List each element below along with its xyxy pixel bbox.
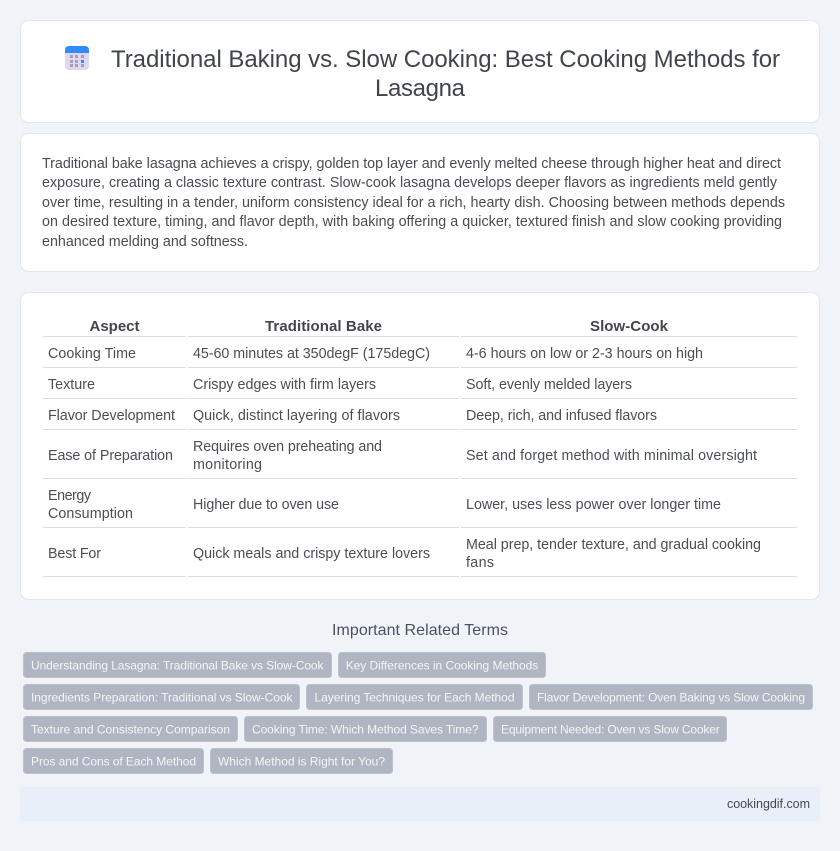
tag: ingredients preparation: Ingredients Preparation: Traditional vs Slow-Cook [31, 690, 294, 704]
tag: key differences [338, 652, 546, 678]
tag: key differences: Key Differences in Cooking Methods [346, 658, 538, 672]
table header row: Traditional Bake [265, 318, 382, 335]
panel: summary paragraph [20, 134, 820, 272]
row: best for: fans [466, 555, 494, 571]
table header row: Slow-Cook [590, 318, 669, 335]
row: best for: Quick meals and crispy texture lovers [193, 546, 430, 562]
row: energy consumption: Lower, uses less power over longer time [466, 497, 721, 513]
row: texture: Texture [48, 377, 95, 393]
tag: understanding lasagna [24, 652, 332, 678]
row: best for [43, 537, 797, 577]
row: texture: Crispy edges with firm layers [193, 377, 376, 393]
tag: ingredients preparation [24, 684, 300, 710]
title: Traditional Baking vs. Slow Cooking: Best Cooking Methods for [111, 46, 780, 73]
row: flavor development: Flavor Development [48, 408, 175, 424]
footer: cookingdif.com [727, 797, 810, 811]
row: texture: Soft, evenly melded layers [466, 377, 632, 393]
tag: texture and consistency: Texture and Consistency Comparison [31, 722, 230, 736]
row: ease of preparation [43, 439, 797, 479]
tag: equipment needed: Equipment Needed: Oven vs Slow Cooker [501, 722, 720, 736]
row: ease of preparation: Requires oven preheating and [193, 439, 382, 455]
row: flavor development: Quick, distinct layering of flavors [193, 408, 400, 424]
row: energy consumption: Energy [48, 488, 92, 504]
tag: understanding lasagna: Understanding Lasagna: Traditional Bake vs Slow-Cook [31, 658, 324, 672]
tag: texture and consistency [24, 716, 238, 742]
table header row: Aspect [90, 318, 140, 335]
title: Lasagna [375, 75, 466, 102]
row: energy consumption: Higher due to oven use [193, 497, 339, 513]
panel: comparison table [20, 292, 820, 600]
panel: summary paragraph: Traditional bake lasagna achieves a crispy, golden top layer and evenly melted cheese through higher heat and direct [42, 156, 781, 172]
row: best for: Best For [48, 546, 101, 562]
heading: important related terms: Important Related Terms [332, 622, 508, 639]
row: best for: Meal prep, tender texture, and gradual cooking [466, 537, 761, 553]
row: ease of preparation: monitoring [193, 457, 262, 473]
tag: cooking time [244, 716, 486, 742]
tag: layering techniques [306, 684, 522, 710]
row: cooking time: Cooking Time [48, 346, 136, 362]
row: flavor development [43, 408, 797, 430]
panel: summary paragraph: on desired texture, timing, and flavor depth, with baking offering a quicker, textured finish and slow cooking providing [42, 214, 782, 230]
panel: summary paragraph: enhanced melding and softness. [42, 234, 248, 250]
tag: equipment needed [494, 716, 726, 742]
tag: flavor development: Flavor Development: Oven Baking vs Slow Cooking [537, 690, 805, 704]
row: energy consumption: Consumption [48, 506, 133, 522]
tag: which method [210, 748, 392, 774]
row: energy consumption [43, 488, 797, 528]
tag: pros and cons: Pros and Cons of Each Method [31, 754, 196, 768]
row: ease of preparation: Set and forget method with minimal oversight [466, 448, 757, 464]
tag: layering techniques: Layering Techniques for Each Method [314, 690, 514, 704]
related term tags [24, 652, 812, 774]
row: cooking time: 4-6 hours on low or 2-3 hours on high [466, 346, 703, 362]
title [111, 46, 780, 102]
row: ease of preparation: Ease of Preparation [48, 448, 173, 464]
tag: pros and cons [24, 748, 204, 774]
tag: which method: Which Method is Right for You? [218, 754, 385, 768]
panel: summary paragraph: over time, resulting in a tender, uniform consistency ideal for a rich, hearty dish. Choosing between methods depends [42, 195, 785, 211]
table header row [43, 318, 797, 337]
icon: calendar [65, 46, 89, 70]
row: cooking time [43, 346, 797, 368]
tag: cooking time: Cooking Time: Which Method Saves Time? [252, 722, 479, 736]
footer [20, 787, 820, 821]
row: texture [43, 377, 797, 399]
panel: title header [20, 20, 820, 122]
panel: summary paragraph: exposure, creating a classic texture contrast. Slow-cook lasagna develops deeper flavors as ingredients meld gently [42, 175, 778, 191]
tag: flavor development [530, 684, 812, 710]
row: flavor development: Deep, rich, and infused flavors [466, 408, 657, 424]
row: cooking time: 45-60 minutes at 350degF (175degC) [193, 346, 430, 362]
